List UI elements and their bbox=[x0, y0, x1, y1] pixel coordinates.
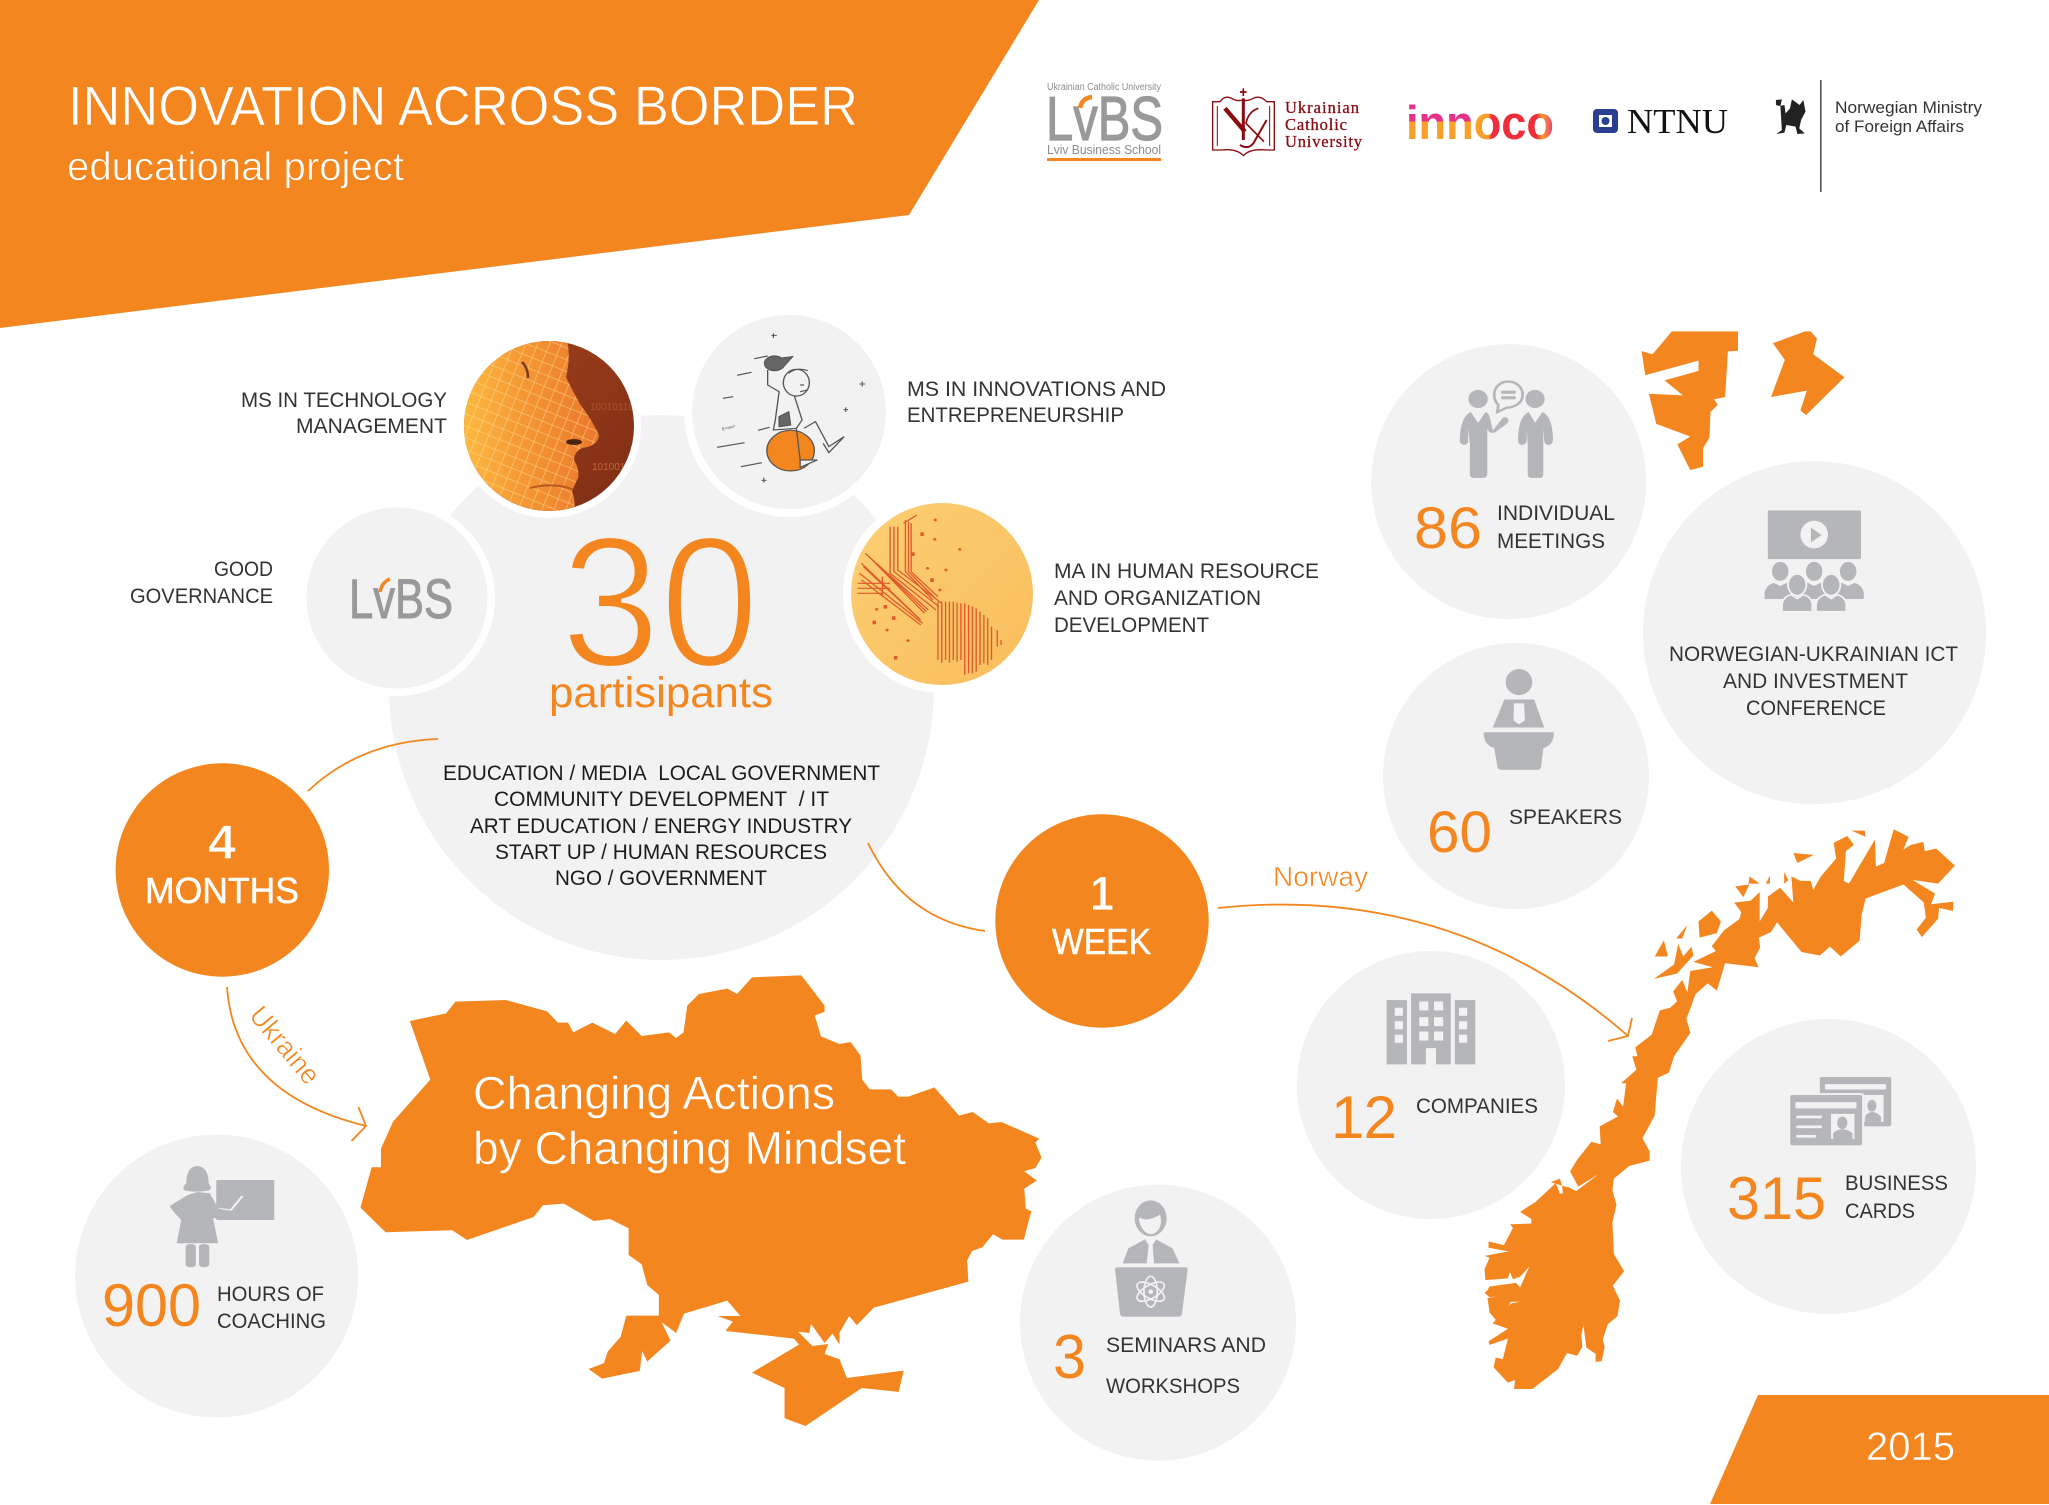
label bbox=[1054, 560, 1319, 637]
label bbox=[217, 1283, 326, 1333]
label: GOVERNANCE bbox=[130, 585, 273, 608]
text block: sectors: COMMUNITY DEVELOPMENT / IT bbox=[494, 787, 829, 811]
logo: Ukrainian Catholic University: University bbox=[1285, 132, 1363, 151]
logo: innoco: innoco bbox=[1406, 96, 1554, 149]
number: 3 bbox=[1053, 1323, 1086, 1392]
logo: Lviv Business School: Lviv Business School bbox=[1047, 142, 1161, 157]
heading: partisipants: partisipants bbox=[549, 669, 773, 717]
label: CONFERENCE bbox=[1746, 697, 1886, 720]
footer: year bbox=[1710, 1395, 2049, 1504]
logo: LvBS: LvBS bbox=[349, 567, 453, 630]
program: MA in Human Resource and Organization Development bbox=[843, 495, 1319, 693]
panel: 30 participants bbox=[389, 415, 934, 960]
logo: NTNU: NTNU bbox=[1627, 102, 1728, 141]
label: MS IN INNOVATIONS AND bbox=[907, 378, 1166, 401]
panel: 86 individual meetings bbox=[1371, 344, 1646, 619]
subtitle: educational project bbox=[67, 145, 404, 189]
text block: sectors: EDUCATION / MEDIA LOCAL GOVERNMENT bbox=[443, 761, 880, 785]
label: MANAGEMENT bbox=[296, 415, 447, 438]
label bbox=[1106, 1334, 1266, 1398]
arrow: Norway path bbox=[1218, 905, 1632, 1041]
label: CARDS bbox=[1845, 1200, 1915, 1223]
label: GOOD bbox=[214, 558, 273, 581]
label bbox=[1497, 502, 1615, 553]
label: HOURS OF bbox=[217, 1283, 324, 1306]
logo: Norwegian Ministry of Foreign Affairs: of Foreign Affairs bbox=[1835, 117, 1964, 136]
label bbox=[907, 378, 1166, 427]
arrow: participants to 1 week bbox=[868, 843, 985, 931]
title: INNOVATION ACROSS BORDER bbox=[68, 74, 858, 137]
text block: sectors bbox=[443, 761, 880, 890]
badge: 1 week: WEEK bbox=[1052, 921, 1151, 962]
icon: office building bbox=[1387, 993, 1475, 1064]
map: Svalbard bbox=[1642, 331, 1844, 470]
text block: sectors: NGO / GOVERNMENT bbox=[555, 866, 767, 890]
label: INDIVIDUAL bbox=[1497, 502, 1615, 525]
badge: 4 months: 4 bbox=[208, 817, 236, 870]
label bbox=[1845, 1172, 1948, 1223]
number: 315 bbox=[1727, 1165, 1826, 1232]
header banner bbox=[0, 0, 1039, 328]
arrow: to participants from 4 months bbox=[308, 739, 438, 791]
badge: 1 week bbox=[995, 814, 1209, 1028]
image: digital face bbox=[464, 341, 634, 511]
number: 12 bbox=[1331, 1084, 1397, 1151]
label bbox=[130, 558, 273, 608]
program: MS in Technology Management bbox=[241, 334, 641, 520]
panel: Norwegian-Ukrainian ICT and investment conference bbox=[1643, 461, 1986, 804]
image: man riding ball sketch: E=mc² bbox=[721, 424, 736, 432]
arrow: Ukraine path bbox=[227, 987, 366, 1141]
text block: sectors: ART EDUCATION / ENERGY INDUSTRY bbox=[470, 814, 852, 838]
map: Ukraine bbox=[360, 975, 1042, 1426]
number: 60 bbox=[1427, 800, 1492, 865]
image: digital face: 10010110 bbox=[590, 402, 634, 413]
program: MS in Innovations and Entrepreneurship bbox=[684, 307, 1166, 517]
label: SEMINARS AND bbox=[1106, 1334, 1266, 1357]
logo: Ukrainian Catholic University bbox=[1213, 88, 1363, 156]
label: COACHING bbox=[217, 1310, 326, 1333]
image: circuit map of Ukraine bbox=[858, 515, 1001, 675]
label: WORKSHOPS bbox=[1106, 1375, 1240, 1398]
label: MA IN HUMAN RESOURCE bbox=[1054, 560, 1319, 583]
icon: crest bbox=[1213, 88, 1274, 156]
badge: 4 months bbox=[116, 763, 329, 977]
label: NORWEGIAN-UKRAINIAN ICT bbox=[1669, 643, 1958, 666]
label: COMPANIES bbox=[1416, 1095, 1538, 1118]
label: ENTREPRENEURSHIP bbox=[907, 404, 1124, 427]
label: MS IN TECHNOLOGY bbox=[241, 389, 447, 412]
big number: 30 bbox=[561, 499, 759, 706]
label: Ukraine: Ukraine bbox=[243, 1000, 326, 1090]
heading: slogan: Changing Actions bbox=[473, 1067, 835, 1119]
icon: business cards bbox=[1788, 1077, 1891, 1147]
logo: Lviv Business School: LvBS bbox=[1046, 85, 1163, 154]
heading: slogan: by Changing Mindset bbox=[473, 1122, 906, 1174]
label: MEETINGS bbox=[1497, 530, 1605, 553]
label: DEVELOPMENT bbox=[1054, 614, 1209, 637]
logo: Norwegian Ministry of Foreign Affairs bbox=[1776, 80, 1983, 192]
label: AND ORGANIZATION bbox=[1054, 587, 1261, 610]
icon: lecturer with laptop bbox=[1115, 1200, 1188, 1317]
program: Good Governance bbox=[130, 500, 495, 696]
number: 86 bbox=[1414, 496, 1482, 561]
icon: audience watching screen bbox=[1765, 510, 1864, 612]
badge: 4 months: MONTHS bbox=[145, 870, 299, 911]
icon: two people talking bbox=[1460, 382, 1553, 478]
icon: teacher bbox=[170, 1166, 274, 1267]
panel: 900 hours of coaching bbox=[75, 1134, 358, 1418]
label: SPEAKERS bbox=[1509, 806, 1622, 829]
text block: sectors: START UP / HUMAN RESOURCES bbox=[495, 840, 827, 864]
logo: Ukrainian Catholic University: Catholic bbox=[1285, 115, 1347, 134]
label bbox=[1669, 643, 1958, 720]
image: man riding ball sketch bbox=[717, 333, 865, 483]
label: AND INVESTMENT bbox=[1723, 670, 1908, 693]
number: 900 bbox=[102, 1272, 201, 1339]
panel: 60 speakers bbox=[1383, 643, 1649, 909]
logo: Ukrainian Catholic University: Ukrainian bbox=[1285, 98, 1359, 117]
logo: Lviv Business School: Ukrainian Catholic University bbox=[1047, 82, 1161, 93]
label bbox=[241, 389, 447, 438]
badge: 1 week: 1 bbox=[1090, 868, 1114, 921]
logo: Norwegian Ministry of Foreign Affairs: Norwegian Ministry bbox=[1835, 98, 1983, 117]
panel: 12 companies bbox=[1297, 951, 1565, 1219]
label: Norway: Norway bbox=[1273, 861, 1368, 892]
footer: year: 2015 bbox=[1866, 1425, 1955, 1469]
map: Norway bbox=[1484, 829, 1955, 1389]
image: digital face: 1010011 bbox=[592, 462, 631, 473]
label: BUSINESS bbox=[1845, 1172, 1948, 1195]
panel: 3 seminars and workshops bbox=[1020, 1185, 1296, 1461]
heading: slogan bbox=[473, 1067, 906, 1174]
icon: lion bbox=[1776, 99, 1806, 134]
panel: 315 business cards bbox=[1681, 1019, 1976, 1314]
icon: speaker at podium bbox=[1484, 669, 1554, 770]
